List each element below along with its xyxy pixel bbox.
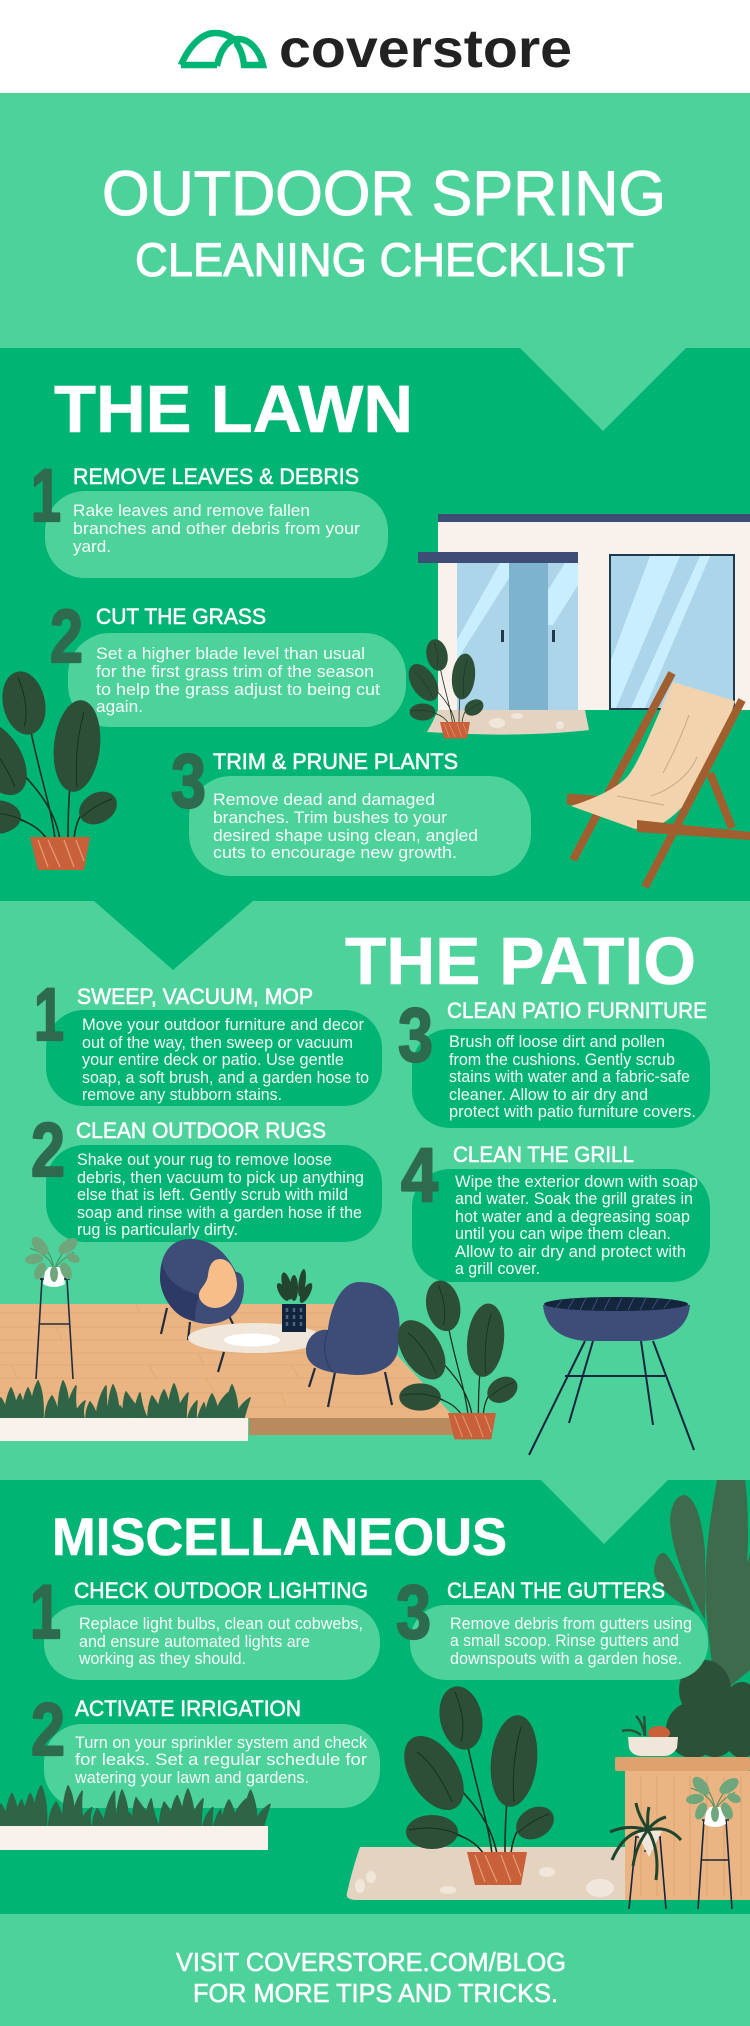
step 1: remove leaves: 1	[31, 454, 61, 537]
illustration: background foliage	[654, 1480, 750, 1758]
step 3: trim and prune: TRIM & PRUNE PLANTS	[213, 749, 458, 774]
step 2: cut the grass: for the first grass trim of the season	[96, 663, 374, 681]
step 2: cut the grass: Set a higher blade level than usual	[96, 645, 365, 663]
logo	[181, 19, 572, 79]
illustration: grill	[529, 1297, 694, 1455]
step 2: irrigation	[31, 1688, 368, 1787]
step 2: cut the grass: CUT THE GRASS	[96, 604, 266, 629]
step 2: cut the grass: 2	[50, 594, 83, 678]
step 1: sweep: SWEEP, VACUUM, MOP	[77, 984, 313, 1009]
step 3: trim and prune	[171, 739, 478, 862]
step 3: gutters: downspouts with a garden hose.	[450, 1650, 682, 1668]
step 1: lighting: working as they should.	[78, 1650, 246, 1668]
illustration: bowl plant	[622, 1716, 678, 1756]
step 3: furniture: 3	[398, 993, 433, 1078]
step 4: grill	[401, 1133, 698, 1278]
step 2: cut the grass: again.	[96, 698, 143, 716]
step 3: trim and prune: branches. Trim bushes to your	[213, 809, 448, 827]
heading: the lawn: THE LAWN	[54, 372, 413, 447]
step 2: cut the grass	[50, 594, 380, 716]
step 4: grill: and water. Soak the grill grates in	[455, 1190, 693, 1208]
step 2: irrigation: ACTIVATE IRRIGATION	[75, 1696, 301, 1721]
illustration: house	[418, 514, 750, 710]
arrow: hero pointer	[520, 348, 686, 431]
step 3: trim and prune: desired shape using clean, angled	[213, 827, 478, 845]
illustration: wooden planter box	[615, 1757, 750, 1900]
header background	[0, 0, 750, 93]
step 1: sweep: 1	[34, 973, 64, 1056]
step 1: sweep	[34, 973, 369, 1104]
illustration: plant on stand	[685, 1774, 742, 1909]
step 1: sweep: Move your outdoor furniture and decor	[82, 1016, 364, 1034]
panel: miscellaneous background	[0, 1480, 750, 1914]
step 1: sweep: soap, a soft brush, and a garden hose to	[82, 1069, 369, 1087]
step 3: furniture: from the cushions. Gently scrub	[449, 1051, 675, 1069]
step 3: furniture: cleaner. Allow to air dry and	[449, 1086, 648, 1104]
step 1: remove leaves: yard.	[73, 538, 111, 556]
step 1: lighting: and ensure automated lights are	[79, 1633, 310, 1651]
icon: coverstore arches	[181, 33, 263, 66]
step 1: remove leaves: Rake leaves and remove fallen	[73, 502, 310, 520]
illustration: round rug	[188, 1323, 322, 1353]
illustration: stone patch	[347, 1847, 640, 1900]
title: OUTDOOR SPRING	[102, 159, 666, 229]
lawn pills	[45, 491, 531, 876]
step 4: grill: hot water and a degreasing soap	[455, 1208, 690, 1226]
step 2: irrigation: watering your lawn and gardens.	[74, 1769, 309, 1787]
step 3: trim and prune: Remove dead and damaged	[213, 791, 435, 809]
step 1: lighting: CHECK OUTDOOR LIGHTING	[74, 1578, 368, 1603]
step 4: grill: 4	[401, 1133, 438, 1218]
step 1: sweep: remove any stubborn stains.	[82, 1086, 282, 1104]
illustration: spider plant on stand	[610, 1803, 681, 1909]
panel: footer: FOR MORE TIPS AND TRICKS.	[193, 1980, 558, 2008]
step 3: furniture: stains with water and a fabric-safe	[449, 1068, 690, 1086]
step 3: trim and prune: 3	[171, 739, 206, 824]
step 2: rugs: else that is left. Gently scrub with mild	[77, 1186, 348, 1204]
wordmark: coverstore	[279, 19, 572, 79]
misc pills	[44, 1605, 708, 1808]
step 1: remove leaves: branches and other debris from your	[73, 520, 361, 538]
step 1: sweep: your entire deck or patio. Use gentle	[82, 1051, 344, 1069]
illustration: large potted plant	[0, 667, 123, 870]
step 4: grill: until you can wipe them clean.	[455, 1225, 671, 1243]
step 2: rugs: Shake out your rug to remove loose	[77, 1151, 332, 1169]
step 2: irrigation: 2	[31, 1688, 65, 1771]
illustration: patio potted plant	[388, 1277, 522, 1439]
panel: footer	[0, 1914, 750, 2026]
step 2: rugs	[31, 1108, 364, 1239]
step 3: furniture	[398, 993, 707, 1121]
call to action: VISIT COVERSTORE.COM/BLOG	[176, 1949, 566, 1977]
heading: the patio: THE PATIO	[345, 924, 696, 999]
step 2: rugs: debris, then vacuum to pick up anything	[77, 1169, 364, 1187]
step 3: gutters	[396, 1570, 692, 1668]
illustration: misc potted plant	[392, 1682, 560, 1885]
patio pills	[46, 1010, 710, 1282]
step 1: remove leaves	[31, 454, 361, 556]
step 3: gutters: a small scoop. Rinse gutters and	[450, 1632, 679, 1650]
illustration: armchair with cushion	[160, 1239, 244, 1372]
step 2: irrigation: Turn on your sprinkler system and check	[75, 1734, 368, 1752]
step 1: remove leaves: REMOVE LEAVES & DEBRIS	[73, 464, 359, 489]
arrow: patio pointer	[541, 1480, 668, 1544]
step 2: rugs: 2	[31, 1108, 65, 1193]
step 3: gutters: Remove debris from gutters using	[450, 1615, 692, 1633]
illustration: table plant	[275, 1269, 315, 1332]
heading: miscellaneous: MISCELLANEOUS	[52, 1508, 507, 1567]
step 4: grill: a grill cover.	[455, 1260, 540, 1278]
step 3: furniture: CLEAN PATIO FURNITURE	[447, 998, 707, 1023]
step 3: gutters: CLEAN THE GUTTERS	[447, 1578, 665, 1603]
step 4: grill: Wipe the exterior down with soap	[455, 1173, 698, 1191]
illustration: wooden deck	[0, 1304, 455, 1435]
step 2: rugs: CLEAN OUTDOOR RUGS	[76, 1118, 326, 1143]
step 2: rugs: soap and rinse with a garden hose if the	[77, 1204, 362, 1222]
illustration: faded plant stand	[24, 1234, 81, 1379]
panel: patio background	[0, 901, 750, 1480]
illustration: door mat	[427, 710, 589, 735]
arrow: lawn pointer	[94, 901, 253, 970]
step 1: lighting	[30, 1570, 368, 1668]
illustration: small potted plant	[402, 637, 486, 738]
illustration: planter with grass	[0, 1786, 270, 1850]
panel: lawn background	[0, 348, 750, 901]
step 4: grill: CLEAN THE GRILL	[453, 1142, 634, 1167]
step 3: gutters: 3	[396, 1570, 431, 1655]
step 2: rugs: rug is particularly dirty.	[77, 1221, 238, 1239]
step 3: furniture: Brush off loose dirt and pollen	[449, 1033, 665, 1051]
step 4: grill: Allow to air dry and protect with	[455, 1243, 686, 1261]
panel: hero	[0, 93, 750, 348]
step 2: cut the grass: to help the grass adjust to being cut	[96, 681, 380, 699]
step 1: lighting: Replace light bulbs, clean out cobwebs,	[79, 1615, 363, 1633]
step 3: furniture: protect with patio furniture covers.	[449, 1103, 696, 1121]
illustration: deck chair	[567, 673, 750, 887]
subtitle: CLEANING CHECKLIST	[135, 233, 634, 286]
step 3: trim and prune: cuts to encourage new growth.	[213, 844, 457, 862]
step 1: sweep: out of the way, then sweep or vacuum	[82, 1034, 353, 1052]
illustration: second armchair	[306, 1282, 400, 1407]
step 2: irrigation: for leaks. Set a regular schedule for	[75, 1751, 368, 1769]
illustration: planter with grass	[0, 1381, 250, 1441]
step 1: lighting: 1	[30, 1570, 61, 1655]
